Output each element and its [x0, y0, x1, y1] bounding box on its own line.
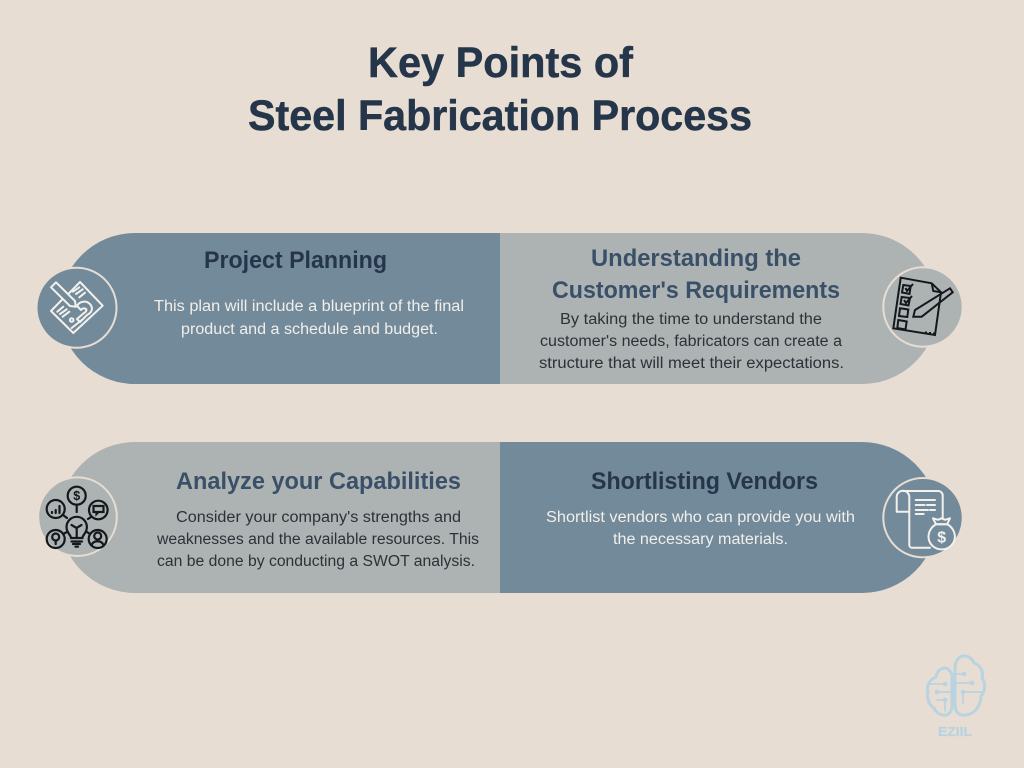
text: capabilities body: can be done by conducting a SWOT analysis.: [157, 553, 475, 570]
heading: shortlisting vendors: Shortlisting Vendors: [591, 468, 818, 495]
text: vendors body: [546, 509, 855, 548]
text: requirements body: [539, 311, 844, 372]
panel: project planning: [60, 233, 500, 384]
icon: invoice scroll with money bag: [883, 478, 963, 557]
icon: invoice scroll with money bag: $: [937, 530, 946, 546]
title: Key Points of: [368, 39, 634, 87]
text: requirements body: customer's needs, fabricators can create a: [540, 333, 842, 350]
panel: shortlisting vendors: [500, 442, 938, 593]
text: requirements body: structure that will meet their expectations.: [539, 355, 844, 372]
heading: understanding requirements: Understanding the: [591, 245, 801, 272]
heading: understanding requirements: [552, 245, 840, 304]
heading: project planning: Project Planning: [204, 247, 387, 274]
text: project planning body: [154, 298, 464, 338]
text: requirements body: By taking the time to understand the: [560, 311, 822, 328]
text: capabilities body: weaknesses and the available resources. This: [156, 531, 479, 548]
panel: understanding the customer's requirements: [500, 233, 938, 384]
logo: EZIIL brain: EZIIL: [938, 725, 972, 739]
logo: EZIIL brain: [927, 656, 985, 739]
panel: analyze your capabilities: [60, 442, 500, 593]
icon: checklist with pencil: [883, 267, 963, 347]
text: vendors body: Shortlist vendors who can provide you with: [546, 509, 855, 526]
icon: light bulb with network of symbols: $: [73, 489, 80, 503]
icon: light bulb with network of symbols: [38, 477, 117, 556]
text: vendors body: the necessary materials.: [613, 531, 788, 548]
text: capabilities body: [156, 509, 479, 570]
text: project planning body: product and a schedule and budget.: [181, 321, 438, 338]
title: [248, 39, 752, 140]
heading: analyze capabilities: Analyze your Capabilities: [176, 468, 461, 495]
text: capabilities body: Consider your company's strengths and: [176, 509, 461, 526]
title: Steel Fabrication Process: [248, 92, 752, 140]
text: project planning body: This plan will include a blueprint of the final: [154, 298, 464, 315]
icon: blueprint with pencil and question mark: [36, 268, 116, 348]
heading: understanding requirements: Customer's Requirements: [552, 277, 840, 304]
